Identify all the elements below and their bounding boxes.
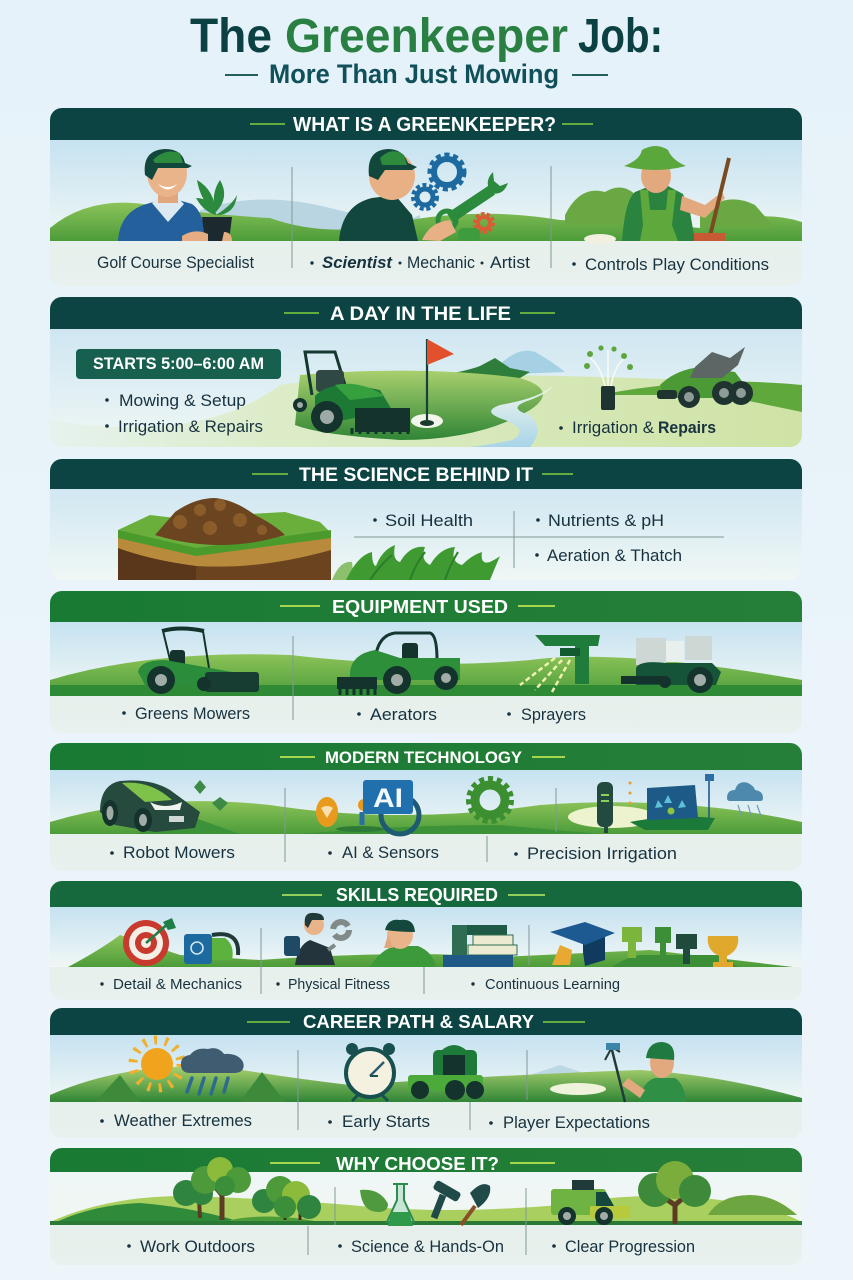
captions: technology: Precision Irrigation xyxy=(527,844,677,863)
panel: a day in the life xyxy=(50,297,802,447)
captions: skills: Detail & Mechanics xyxy=(113,976,242,993)
caption: irrigation and repairs: Repairs xyxy=(658,418,716,437)
icon: stack of books xyxy=(443,925,517,967)
caption: golf course specialist: Golf Course Specialist xyxy=(97,253,254,272)
panel: equipment used xyxy=(50,591,802,733)
icon: fitness worker xyxy=(284,913,349,965)
title: The xyxy=(190,10,272,63)
captions: equipment: Greens Mowers xyxy=(135,704,250,723)
caption: controls play conditions: Controls Play Conditions xyxy=(585,255,769,274)
captions: skills: Continuous Learning xyxy=(485,976,620,993)
icon: ride-on mower xyxy=(657,347,753,408)
divider lines xyxy=(354,511,724,568)
captions: skills xyxy=(100,976,620,993)
icon: sprinkler xyxy=(584,345,633,410)
captions: equipment: Sprayers xyxy=(521,705,586,724)
landscape scene xyxy=(50,770,802,834)
heading: what is a greenkeeper: WHAT IS A GREENKEEPER? xyxy=(293,114,556,136)
subtitle: More Than Just Mowing xyxy=(269,59,559,89)
captions: technology xyxy=(110,843,677,863)
icon: grass tuft xyxy=(332,545,500,580)
icon: trees xyxy=(173,1157,321,1220)
captions: reasons: Science & Hands-On xyxy=(351,1237,504,1256)
heading: career path and salary: CAREER PATH & SALARY xyxy=(303,1012,534,1032)
icon: sprayer truck xyxy=(621,636,721,693)
caption: scientist mechanic artist xyxy=(310,256,530,268)
heading: a day in the life: A DAY IN THE LIFE xyxy=(330,304,511,325)
heading: equipment used: EQUIPMENT USED xyxy=(332,597,508,617)
heading: why choose it xyxy=(50,1148,802,1174)
heading: a day in the life xyxy=(50,297,802,329)
icon: leaf, flask and tools xyxy=(360,1180,490,1226)
title: Greenkeeper xyxy=(285,10,568,63)
icon: utility vehicle xyxy=(551,1180,630,1225)
icon: mechanic with gears and wrench xyxy=(339,149,508,241)
list: science topics xyxy=(373,514,681,561)
captions: challenges xyxy=(100,1111,650,1132)
icon: alarm clock and tractor xyxy=(346,1043,484,1101)
divider lines xyxy=(292,166,551,268)
icon: target and toolbag xyxy=(123,918,238,966)
icon: greenkeeper with flagstick xyxy=(605,1042,686,1102)
panel: the science behind it xyxy=(50,459,802,580)
divider lines xyxy=(261,925,529,994)
badge: starts 5:00-6:00 am: STARTS 5:00–6:00 AM xyxy=(93,354,264,373)
icon: tree right xyxy=(638,1161,711,1224)
icon: specialist with plant xyxy=(118,149,237,241)
caption: irrigation and repairs: Irrigation & xyxy=(572,418,655,437)
captions: reasons xyxy=(127,1237,695,1256)
captions: equipment xyxy=(122,708,586,724)
list: science topics: Nutrients & pH xyxy=(548,511,664,530)
panel: what is a greenkeeper xyxy=(50,108,802,286)
icon: sun and storm cloud xyxy=(133,1040,244,1094)
icon: sprayer stand xyxy=(520,635,600,692)
divider lines xyxy=(298,1050,527,1130)
captions: skills: Physical Fitness xyxy=(288,976,390,993)
panel: career path and salary xyxy=(50,1008,802,1138)
title xyxy=(190,10,663,63)
landscape scene xyxy=(50,1172,802,1225)
title: Job: xyxy=(578,10,663,63)
icon: tired worker in cap xyxy=(370,920,436,967)
heading: equipment used xyxy=(50,591,802,622)
heading: skills required xyxy=(50,881,802,907)
list: morning tasks: Irrigation & Repairs xyxy=(118,417,263,436)
list: morning tasks xyxy=(105,391,263,436)
captions: challenges: Early Starts xyxy=(342,1112,430,1131)
captions: challenges: Player Expectations xyxy=(503,1113,650,1132)
caption: scientist mechanic artist: Scientist xyxy=(322,253,393,272)
list: science topics: Aeration & Thatch xyxy=(547,546,682,565)
icon: career steps and trophy xyxy=(612,927,738,967)
heading: career path and salary xyxy=(50,1008,802,1035)
caption: scientist mechanic artist: Artist xyxy=(490,253,530,272)
landscape scene xyxy=(50,907,802,967)
icon: greenkeeper with rake xyxy=(584,146,729,244)
icon: green gear xyxy=(469,779,511,821)
heading: modern technology: MODERN TECHNOLOGY xyxy=(325,748,523,767)
heading: skills required: SKILLS REQUIRED xyxy=(336,885,498,905)
icon: greens mower tractor xyxy=(138,628,259,694)
captions: technology: AI & Sensors xyxy=(342,843,439,862)
icon: graduation cap xyxy=(550,922,615,966)
captions: challenges: Weather Extremes xyxy=(114,1111,252,1130)
heading: what is a greenkeeper xyxy=(50,108,802,140)
caption: scientist mechanic artist: Mechanic xyxy=(407,253,475,272)
icon: robot mower xyxy=(100,780,228,832)
icon: greens mower xyxy=(293,352,410,434)
divider lines xyxy=(308,1187,526,1255)
list: science topics: Soil Health xyxy=(385,511,473,530)
captions: reasons: Work Outdoors xyxy=(140,1237,255,1256)
icon: soil block with mound xyxy=(118,498,331,580)
icon: AI and sensors: AI xyxy=(373,783,403,813)
icon: precision irrigation kit xyxy=(568,774,763,833)
icon: flag and hole xyxy=(411,339,454,428)
panel: why choose it xyxy=(50,1148,802,1265)
landscape scene xyxy=(50,622,802,696)
landscape scene xyxy=(50,140,802,241)
heading: the science behind it xyxy=(50,459,802,489)
heading: the science behind it: THE SCIENCE BEHIND IT xyxy=(299,465,533,486)
heading: modern technology xyxy=(50,743,802,770)
panel: modern technology xyxy=(50,743,802,871)
captions: technology: Robot Mowers xyxy=(123,843,235,862)
landscape scene xyxy=(50,1035,802,1102)
list: morning tasks: Mowing & Setup xyxy=(119,391,246,410)
captions: equipment: Aerators xyxy=(370,705,437,724)
badge: starts 5:00-6:00 am xyxy=(76,349,281,379)
heading: why choose it: WHY CHOOSE IT? xyxy=(336,1154,499,1174)
divider line xyxy=(292,636,294,720)
icon: aerator xyxy=(337,633,460,695)
panel: skills required xyxy=(50,881,802,1000)
caption: irrigation and repairs xyxy=(559,421,716,436)
icon: AI and sensors xyxy=(316,780,419,834)
course landscape xyxy=(50,351,802,447)
captions: reasons: Clear Progression xyxy=(565,1237,695,1256)
divider lines xyxy=(285,788,556,862)
